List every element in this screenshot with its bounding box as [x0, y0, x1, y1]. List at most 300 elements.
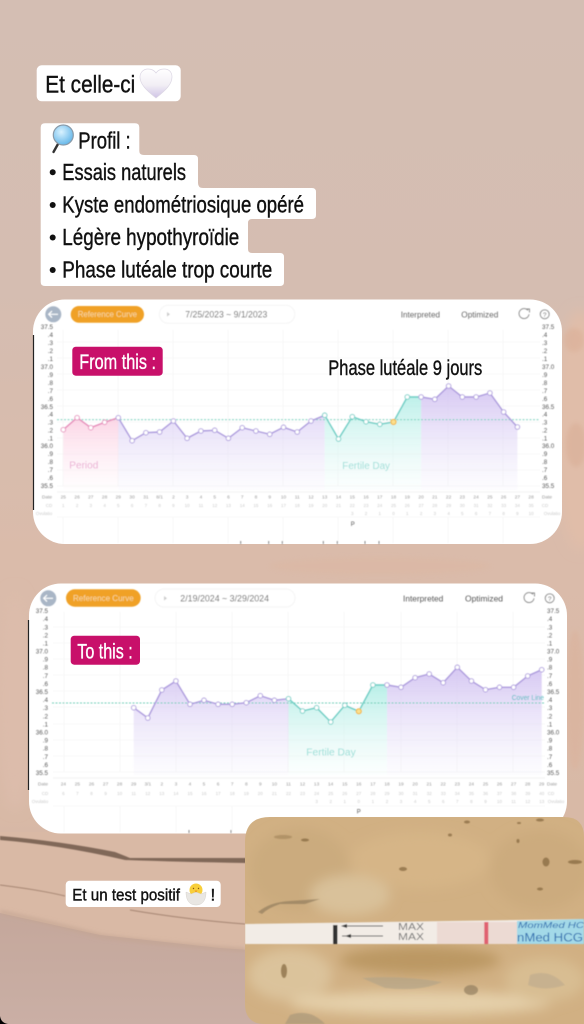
- date row: 11: [295, 494, 300, 500]
- ovulation row: 1: [344, 799, 347, 804]
- ovulation row: 4: [447, 511, 450, 516]
- cycle day row: 28: [370, 791, 376, 796]
- chart header controls: Reference Curve: [78, 310, 138, 319]
- cycle day row: 32: [487, 503, 493, 508]
- y axis left: .2: [43, 632, 48, 640]
- date row: 17: [377, 494, 383, 500]
- y axis right: 36.0: [547, 730, 560, 736]
- callout: Et un test positif: Et un test positif: [72, 886, 180, 905]
- cycle day row: 30: [398, 791, 404, 796]
- y axis left: 37.0: [36, 648, 48, 656]
- date row: Date: [42, 494, 52, 500]
- callout: From this: [72, 347, 163, 376]
- y axis left: .7: [43, 754, 48, 761]
- icon: hatching chick: [186, 884, 206, 905]
- y axis right: .1: [542, 436, 548, 442]
- y axis left: .8: [43, 746, 48, 752]
- date row: 6: [217, 782, 220, 788]
- heading: Et celle-ci: [37, 65, 181, 101]
- date row: 6: [227, 494, 230, 500]
- cycle day row: CD: [548, 791, 555, 796]
- date row: 18: [391, 494, 396, 500]
- y axis left: 36.0: [36, 730, 48, 736]
- date row: 19: [398, 782, 404, 788]
- panel: chart from this: [33, 300, 562, 544]
- y axis left: .7: [48, 388, 53, 395]
- y axis right: .6: [547, 681, 553, 688]
- y axis left: .2: [43, 714, 48, 720]
- cycle day row: 9: [104, 791, 107, 796]
- y axis right: 36.0: [542, 443, 555, 450]
- ovulation row: 6: [442, 799, 445, 804]
- y axis left: 37.0: [41, 364, 53, 371]
- cycle day row: 27: [356, 791, 362, 796]
- y axis right: .4: [542, 412, 548, 418]
- cycle day row: 20: [258, 791, 263, 796]
- text block: profile list: Légère hypothyroïdie: [62, 224, 239, 250]
- test strip: [245, 919, 584, 944]
- date row: 12: [300, 782, 305, 788]
- text block: profile list: [41, 123, 316, 286]
- y axis left: .3: [43, 705, 48, 712]
- y axis left: .6: [48, 475, 53, 482]
- date row: 15: [350, 494, 355, 500]
- cycle day row: 12: [212, 503, 218, 508]
- cycle day row: 11: [131, 791, 137, 796]
- icon: magnifying glass: [53, 125, 73, 152]
- y axis left: .8: [48, 459, 53, 466]
- cycle day row: 38: [511, 791, 517, 796]
- date row: 2: [160, 782, 163, 788]
- ovulation row: 8: [470, 799, 473, 804]
- ovulation row: 3: [400, 799, 403, 804]
- date row: 8/1: [156, 494, 163, 500]
- date row: 15: [342, 782, 348, 788]
- test strip: nMed HCG: [517, 932, 583, 944]
- y axis right: .6: [547, 762, 553, 769]
- ovulation row: 10: [529, 511, 534, 516]
- cycle day row: 8: [158, 503, 161, 508]
- y axis left: .9: [43, 738, 48, 744]
- y axis right: .4: [542, 332, 548, 339]
- y axis left: .7: [48, 467, 53, 474]
- y axis right: .8: [547, 746, 553, 752]
- date row: 28: [102, 494, 108, 500]
- chart header controls: [45, 305, 549, 323]
- callout: Phase lutéale 9 jours: Phase lutéale 9 jours: [328, 356, 482, 380]
- date row: 21: [427, 782, 432, 788]
- cycle day row: 18: [230, 791, 235, 796]
- y axis left: .1: [43, 722, 48, 728]
- date row: 13: [322, 494, 328, 500]
- y axis right: .8: [542, 459, 548, 466]
- ovulation row: 5: [428, 799, 431, 804]
- y axis right: .3: [547, 705, 553, 712]
- ovulation row: 6: [475, 511, 478, 516]
- cycle day row: CD: [42, 791, 49, 796]
- ovulation row: 1: [406, 511, 409, 516]
- date row: 20: [412, 782, 418, 788]
- y axis left: .4: [43, 616, 48, 623]
- chart header controls: Reference Curve: [73, 594, 134, 603]
- cycle day row: 34: [515, 503, 520, 508]
- y axis right: .1: [542, 356, 548, 363]
- cycle day row: 12: [145, 791, 151, 796]
- ovulation row: 1: [379, 511, 382, 516]
- ovulation row: 0: [358, 799, 361, 804]
- y axis left: .1: [48, 356, 53, 363]
- date row: 18: [384, 782, 390, 788]
- y axis right: .1: [547, 640, 553, 648]
- date row: 24: [473, 494, 479, 500]
- marker P: P: [357, 810, 361, 816]
- date row: 21: [432, 494, 438, 500]
- cycle day row: 17: [281, 503, 286, 508]
- y axis right: .9: [547, 738, 553, 744]
- cycle day row: 25: [328, 791, 334, 796]
- date row: 8: [245, 782, 248, 788]
- text block: profile list: Phase lutéale trop courte: [62, 256, 272, 282]
- y axis left: .4: [43, 697, 48, 704]
- date row: 19: [405, 494, 410, 500]
- ovulation row: Ovulatio: [544, 511, 561, 516]
- y axis left: 35.5: [41, 483, 53, 490]
- cycle day row: 32: [427, 791, 432, 796]
- date row: 10: [281, 494, 286, 500]
- chart header controls: 2/19/2024 ~ 3/29/2024: [180, 593, 269, 603]
- cycle day row: 14: [173, 791, 179, 796]
- cycle day row: 40: [539, 791, 545, 796]
- y axis left: .8: [43, 664, 48, 672]
- cycle day row: 33: [441, 791, 446, 796]
- date row: 14: [328, 782, 334, 788]
- cycle day row: 13: [226, 503, 231, 508]
- cycle day row: 25: [391, 503, 396, 508]
- ovulation row: 0: [392, 511, 395, 516]
- y axis right: 37.5: [547, 608, 560, 615]
- heading: Et celle-ci: Et celle-ci: [45, 72, 135, 99]
- cycle day row: 1: [62, 503, 65, 508]
- date row: 3/1: [144, 782, 151, 788]
- cycle day row: 15: [253, 503, 259, 508]
- date row: 9: [268, 494, 271, 500]
- date row: 26: [74, 494, 80, 500]
- date row: 4: [189, 782, 192, 788]
- callout: Et un test positif: !: [210, 886, 215, 905]
- date row: 7: [241, 494, 244, 500]
- y axis right: .2: [542, 428, 548, 434]
- cycle day row: 29: [446, 503, 452, 508]
- y axis right: .7: [547, 754, 553, 761]
- ovulation row: 11: [511, 799, 516, 804]
- date row: 25: [61, 494, 66, 500]
- y axis left: 36.0: [41, 443, 53, 450]
- cycle day row: 8: [90, 791, 93, 796]
- y axis left: 37.5: [41, 324, 53, 331]
- y axis left: .4: [48, 412, 53, 418]
- ovulation row: 12: [525, 799, 531, 804]
- date row: 27: [515, 494, 520, 500]
- cycle day row: 16: [267, 503, 273, 508]
- cycle day row: 24: [314, 791, 320, 796]
- y axis left: 37.5: [36, 608, 48, 615]
- y axis right: .3: [547, 624, 553, 632]
- date row: 8: [255, 494, 258, 500]
- chart header controls: Optimized: [465, 593, 503, 603]
- date row: 25: [487, 494, 493, 500]
- cycle day row: 24: [377, 503, 383, 508]
- cycle day row: 16: [201, 791, 207, 796]
- date row: 7: [231, 782, 234, 788]
- cycle day row: 6: [62, 791, 65, 796]
- date row: 3: [175, 782, 178, 788]
- date row: 28: [117, 782, 123, 788]
- date row: 11: [286, 782, 291, 788]
- date row: 12: [308, 494, 314, 500]
- cycle day row: 22: [286, 791, 291, 796]
- y axis right: 37.0: [542, 364, 555, 371]
- date row: 16: [356, 782, 362, 788]
- y axis right: .3: [542, 420, 548, 426]
- test strip: MomMed HC: [518, 921, 584, 930]
- date row: 23: [455, 782, 460, 788]
- date row: 14: [336, 494, 341, 500]
- cycle day row: 33: [501, 503, 507, 508]
- y axis left: .6: [43, 681, 48, 688]
- y axis left: .4: [48, 332, 53, 339]
- text block: profile list: Kyste endométriosique opéré: [62, 192, 304, 218]
- test strip: MAX: [398, 932, 424, 943]
- callout: From this: From this :: [79, 350, 156, 374]
- cycle day row: 26: [405, 503, 410, 508]
- cycle day row: 2: [76, 503, 79, 508]
- cycle day row: 31: [413, 791, 418, 796]
- date row: 29: [131, 782, 137, 788]
- ovulation row: Ovulatio: [36, 511, 53, 516]
- date row: 26: [89, 782, 94, 788]
- test strip: MAX: [398, 922, 424, 933]
- photo: positive pregnancy test on stone: [245, 817, 584, 1024]
- cycle day row: 23: [363, 503, 369, 508]
- date row: Date: [542, 494, 552, 500]
- y axis left: .1: [48, 436, 53, 442]
- y axis right: .6: [542, 475, 548, 482]
- cycle day row: CD: [46, 503, 53, 508]
- ovulation row: 3: [315, 799, 318, 804]
- cycle day row: 10: [185, 503, 190, 508]
- date row: 4: [200, 494, 203, 500]
- date row: 22: [446, 494, 452, 500]
- ovulation row: 4: [414, 799, 417, 804]
- date row: 13: [314, 782, 320, 788]
- cycle day row: 28: [432, 503, 438, 508]
- y axis right: 36.5: [542, 404, 555, 411]
- date row: 24: [61, 782, 66, 788]
- y axis right: .8: [542, 380, 548, 387]
- ovulation row: Ovulatio: [548, 799, 565, 804]
- y axis left: 35.5: [36, 770, 48, 777]
- y axis left: .9: [48, 372, 53, 379]
- cycle day row: 36: [483, 791, 488, 796]
- cycle day row: 29: [384, 791, 390, 796]
- chart header controls: 7/25/2023 ~ 9/1/2023: [185, 310, 267, 320]
- date row: 31: [143, 494, 149, 500]
- ovulation row: 1: [372, 799, 375, 804]
- text block: profile list: Essais naturels: [62, 159, 186, 185]
- ovulation row: 3: [434, 511, 437, 516]
- y axis right: .2: [542, 348, 548, 355]
- y axis right: .7: [547, 673, 553, 680]
- cycle day row: 18: [295, 503, 300, 508]
- date row: 24: [469, 782, 474, 788]
- line chart: temperature curve: [52, 665, 544, 775]
- y axis right: 35.5: [542, 483, 555, 490]
- date row: 28: [525, 782, 531, 788]
- date row: 3: [186, 494, 189, 500]
- y axis right: .7: [542, 467, 548, 474]
- cycle day row: 6: [131, 503, 134, 508]
- cycle day row: 27: [419, 503, 424, 508]
- y axis left: .8: [48, 380, 53, 387]
- label: Fertile Day: Fertile Day: [306, 748, 356, 759]
- y axis left: .3: [48, 340, 53, 347]
- chart header controls: [40, 589, 554, 607]
- date row: 25: [75, 782, 80, 788]
- date row: 23: [460, 494, 465, 500]
- ovulation row: 7: [489, 511, 492, 516]
- date row: 28: [528, 494, 534, 500]
- y axis right: .8: [547, 664, 553, 672]
- y axis left: 36.5: [36, 689, 48, 696]
- cycle day row: 10: [117, 791, 123, 796]
- cycle day row: 34: [455, 791, 460, 796]
- cycle day row: 35: [469, 791, 474, 796]
- cycle day row: 11: [199, 503, 204, 508]
- callout: To this: [71, 636, 140, 665]
- ovulation row: 2: [329, 799, 332, 804]
- y axis right: .4: [547, 616, 553, 623]
- y axis right: .6: [542, 396, 548, 403]
- ovulation row: 2: [386, 799, 389, 804]
- ovulation row: 9: [516, 511, 519, 516]
- y axis right: .9: [542, 451, 548, 458]
- y axis right: .2: [547, 632, 553, 640]
- y axis right: .9: [547, 656, 553, 664]
- y axis right: 35.5: [547, 770, 560, 777]
- text block: profile list: Profil :: [78, 127, 131, 153]
- ovulation row: 10: [497, 799, 502, 804]
- ovulation row: 7: [456, 799, 459, 804]
- cycle day row: 5: [117, 503, 120, 508]
- label: Cover Line: Cover Line: [512, 693, 544, 702]
- date row: 26: [497, 782, 502, 788]
- y axis right: .9: [542, 372, 548, 379]
- y axis left: .2: [48, 428, 53, 434]
- panel: chart to this: [28, 584, 567, 834]
- callout: Et un test positif: [66, 881, 221, 907]
- line chart: temperature curve: [57, 384, 539, 490]
- date row: 29: [539, 782, 545, 788]
- date row: 5: [203, 782, 206, 788]
- date row: 27: [88, 494, 94, 500]
- cycle day row: 3: [90, 503, 93, 508]
- ovulation row: 8: [502, 511, 505, 516]
- cycle day row: 15: [187, 791, 193, 796]
- date row: 26: [501, 494, 507, 500]
- y axis left: .9: [43, 656, 48, 664]
- ovulation row: 9: [484, 799, 487, 804]
- cycle day row: 26: [342, 791, 348, 796]
- y axis left: 36.5: [41, 404, 53, 411]
- y axis right: 37.5: [542, 324, 555, 331]
- date row: 2: [172, 494, 175, 500]
- date row: 17: [370, 782, 376, 788]
- cycle day row: 23: [300, 791, 305, 796]
- cycle day row: 35: [529, 503, 534, 508]
- y axis right: .4: [547, 697, 553, 704]
- ovulation row: 5: [461, 511, 464, 516]
- cycle day row: 21: [336, 503, 341, 508]
- date row: 25: [483, 782, 488, 788]
- cycle day row: 20: [322, 503, 328, 508]
- y axis right: 36.5: [547, 689, 560, 696]
- date row: 22: [441, 782, 446, 788]
- y axis left: .9: [48, 451, 53, 458]
- y axis left: .2: [48, 348, 53, 355]
- date row: Date: [38, 782, 48, 788]
- y axis right: .2: [547, 714, 553, 720]
- date row: 27: [103, 782, 109, 788]
- stone slab: [0, 832, 260, 1024]
- cycle day row: 19: [308, 503, 314, 508]
- cycle day row: 37: [497, 791, 502, 796]
- cycle day row: 31: [474, 503, 479, 508]
- chart header controls: ?: [548, 596, 552, 603]
- date row: 29: [116, 494, 121, 500]
- cycle day row: 30: [460, 503, 465, 508]
- chart header controls: Interpreted: [403, 593, 444, 603]
- y axis left: .7: [43, 673, 48, 680]
- cycle day row: 14: [240, 503, 245, 508]
- chart header controls: Optimized: [461, 310, 499, 320]
- cycle day row: 19: [244, 791, 249, 796]
- label: Period: Period: [69, 460, 98, 471]
- date row: 27: [511, 782, 517, 788]
- cycle day row: 39: [525, 791, 531, 796]
- date row: 16: [363, 494, 369, 500]
- label: Fertile Day: Fertile Day: [342, 461, 390, 472]
- chart header controls: ?: [543, 312, 547, 319]
- y axis left: .3: [43, 624, 48, 632]
- y axis right: .3: [542, 340, 548, 347]
- ovulation row: 2: [365, 511, 368, 516]
- date row: Date: [547, 782, 557, 788]
- y axis right: .7: [542, 388, 548, 395]
- marker P: P: [351, 522, 355, 528]
- cycle day row: 4: [103, 503, 106, 508]
- ovulation row: 13: [539, 799, 545, 804]
- cycle day row: 7: [76, 791, 79, 796]
- cycle day row: CD: [542, 503, 549, 508]
- y axis left: .1: [43, 640, 48, 648]
- date row: 9: [259, 782, 262, 788]
- cycle day row: 22: [350, 503, 355, 508]
- ovulation row: 3: [351, 511, 354, 516]
- date row: 20: [418, 494, 424, 500]
- ovulation row: Ovulatio: [32, 799, 49, 804]
- date row: 10: [272, 782, 277, 788]
- y axis left: .3: [48, 420, 53, 426]
